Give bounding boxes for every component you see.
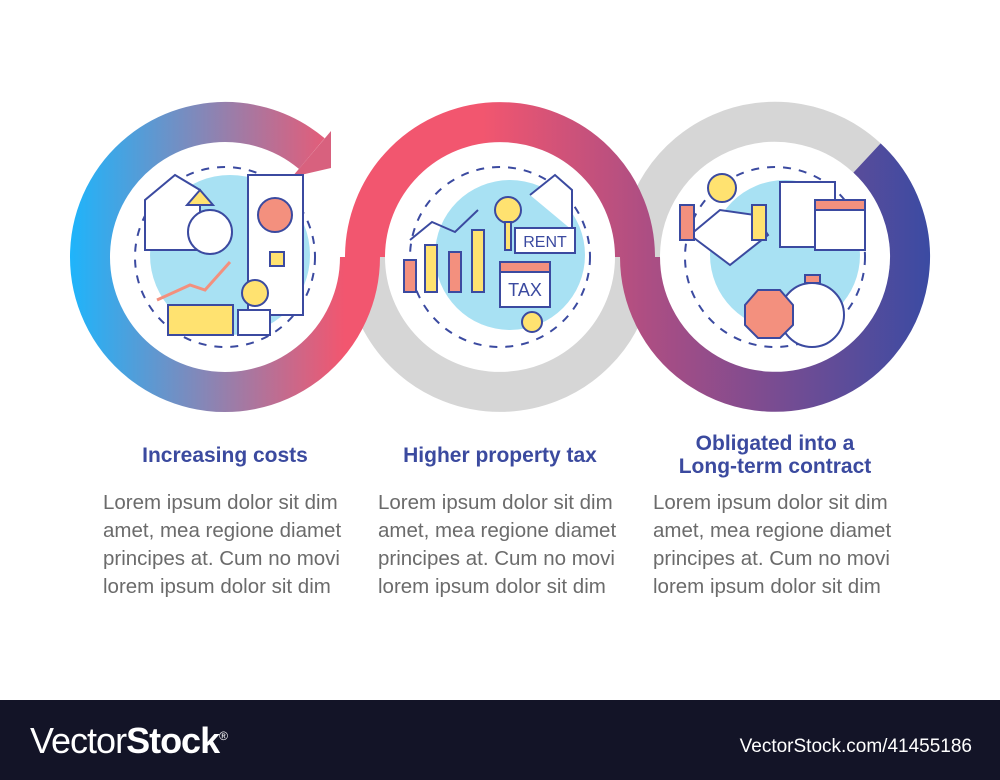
- rings diagram: TAX: [508, 280, 542, 300]
- title: long-term contract: [679, 432, 871, 478]
- text: contract: Lorem ipsum dolor sit dim amet, mea regione diamet principes at. Cum no movi lorem ipsum dolor sit dim: [653, 491, 891, 598]
- title: long-term contract: Obligated into a: [696, 432, 854, 455]
- icon: increasing costs: [135, 167, 315, 347]
- text: increasing costs: Lorem ipsum dolor sit dim amet, mea regione diamet principes at. Cum no movi lorem ipsum dolor sit dim: [103, 491, 341, 598]
- icon: property tax: [404, 167, 590, 347]
- title: long-term contract: Long-term contract: [679, 455, 871, 478]
- rings diagram: [70, 102, 930, 412]
- footer bar: [0, 700, 1000, 780]
- title: higher property tax: Higher property tax: [403, 444, 597, 467]
- icon: long-term contract: [680, 167, 865, 347]
- title: increasing costs: Increasing costs: [142, 444, 308, 467]
- text: property tax: Lorem ipsum dolor sit dim amet, mea regione diamet principes at. Cum no movi lorem ipsum dolor sit dim: [378, 491, 616, 598]
- footer logo: VectorStock®: [30, 720, 227, 761]
- rings diagram: RENT: [523, 234, 567, 251]
- footer url: VectorStock.com/41455186: [740, 736, 972, 757]
